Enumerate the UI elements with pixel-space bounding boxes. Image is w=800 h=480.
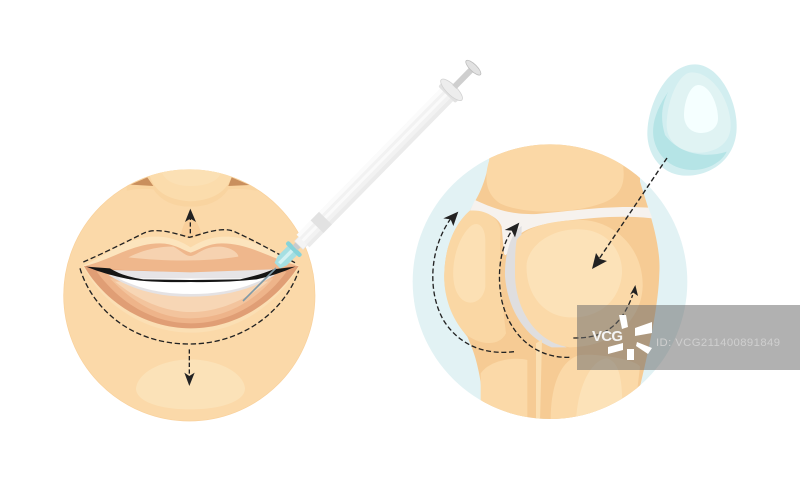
implant egg xyxy=(647,64,737,176)
thigh divider xyxy=(536,339,542,422)
body xyxy=(444,140,660,427)
dashed arrow left xyxy=(433,212,514,352)
cleft shadow xyxy=(505,226,567,347)
mouth line xyxy=(86,267,295,282)
needle xyxy=(243,268,276,301)
nose xyxy=(127,167,257,207)
teal circle xyxy=(413,144,687,419)
watermark logo xyxy=(608,315,652,360)
teeth xyxy=(108,275,275,297)
panel: buttock implant xyxy=(413,140,687,427)
left buttock xyxy=(444,211,506,343)
watermark band xyxy=(577,305,800,370)
arrow up xyxy=(185,209,196,233)
syringe barrel and plunger xyxy=(288,55,486,255)
panel: lip filler xyxy=(64,167,315,421)
syringe hub xyxy=(270,236,307,273)
face circle xyxy=(64,170,315,421)
lower lip rim xyxy=(83,266,299,333)
left thigh xyxy=(481,359,527,423)
thong xyxy=(470,200,652,255)
body silhouette xyxy=(444,140,660,427)
upper lip xyxy=(85,243,297,273)
watermark VCG: VCG xyxy=(592,328,623,345)
right buttock xyxy=(515,220,643,347)
chin highlight xyxy=(136,359,245,409)
dashed arrow middle xyxy=(499,223,569,357)
waist highlight xyxy=(486,140,624,212)
upper teeth xyxy=(110,269,273,278)
arrow down xyxy=(184,349,195,386)
upper lip rim xyxy=(83,237,299,266)
watermark ID: ID: VCG211400891849 xyxy=(656,337,780,349)
lower lip xyxy=(84,266,299,328)
syringe xyxy=(243,55,486,301)
implant arrow xyxy=(592,158,667,269)
right thigh xyxy=(551,355,640,423)
philtrum xyxy=(181,213,202,239)
watermark xyxy=(577,305,800,370)
lips xyxy=(83,237,299,333)
dashed arrow right xyxy=(573,285,638,338)
lip outline dashed xyxy=(80,230,299,344)
